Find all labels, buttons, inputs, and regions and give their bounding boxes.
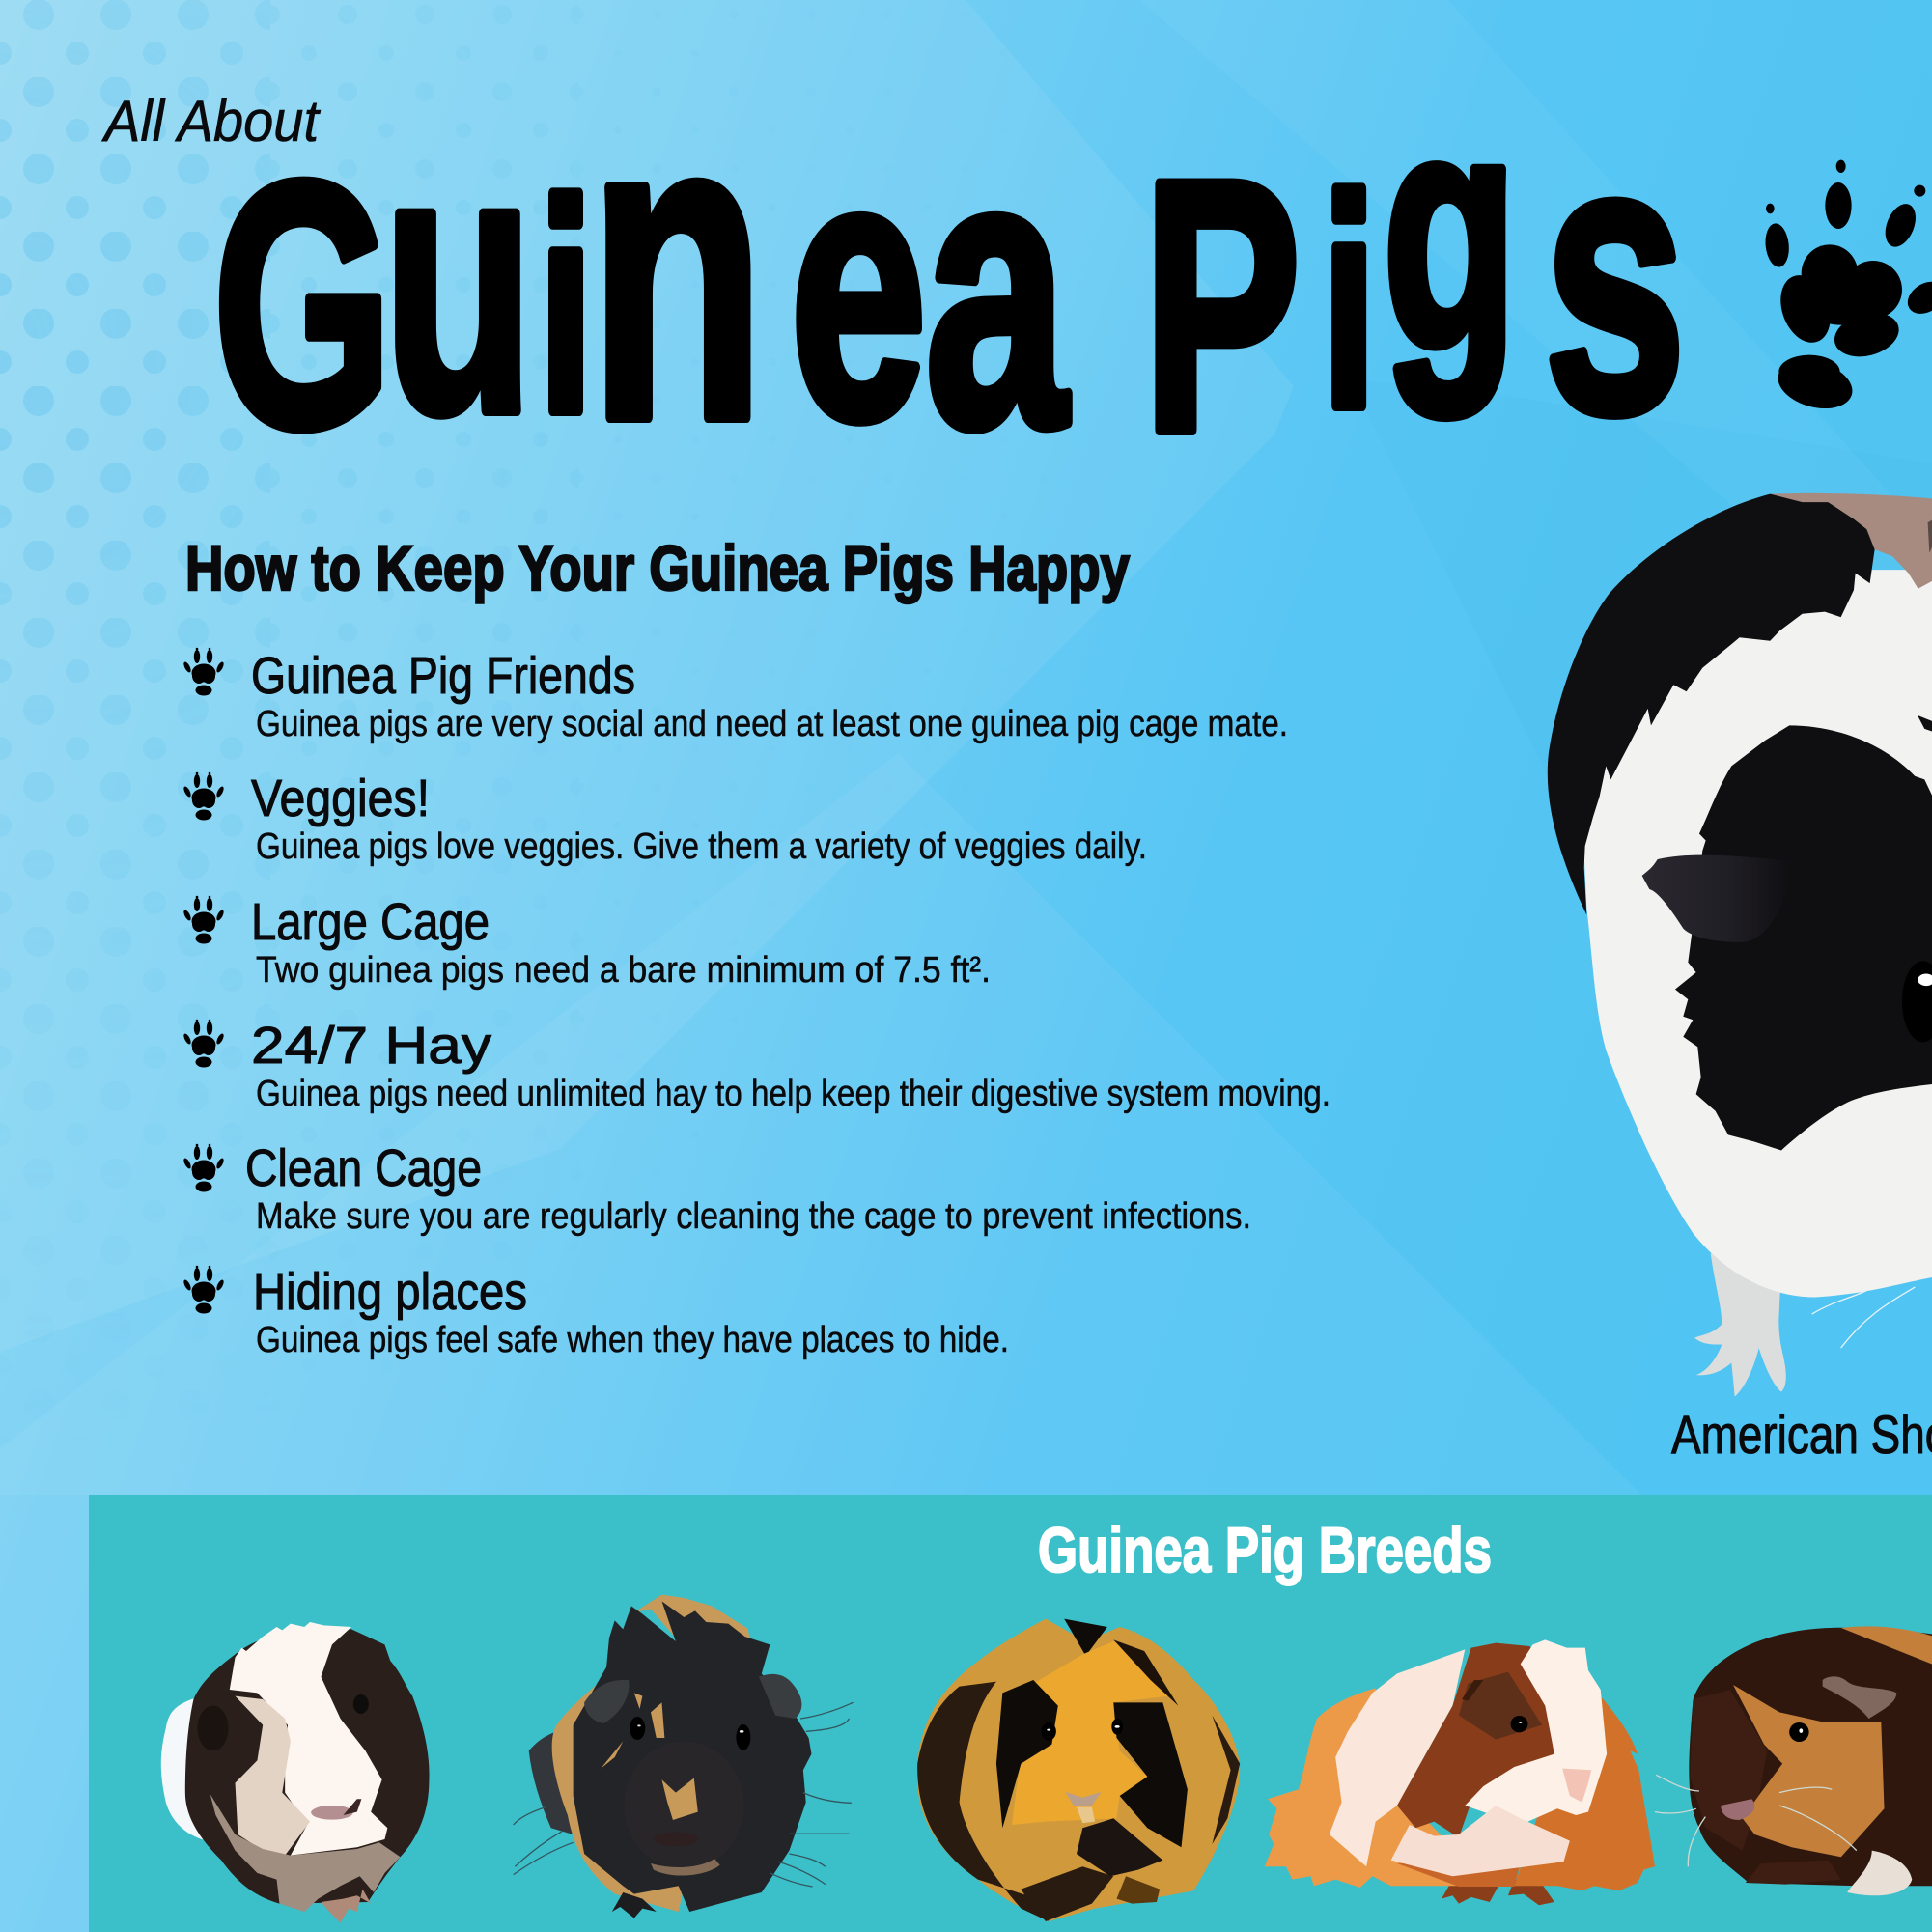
tip: veggies: Guinea pigs love veggies. Give them a variety of veggies daily. bbox=[256, 826, 1147, 867]
icon: large paw print bbox=[1763, 160, 1932, 416]
title: Guinea Pigs: u bbox=[383, 75, 534, 490]
title: Guinea Pigs: n bbox=[590, 24, 765, 510]
title: Guinea Pigs: i bbox=[539, 139, 594, 474]
breed: orange and white abyssinian guinea pig bbox=[1265, 1639, 1655, 1905]
heading: how to keep guinea pigs happy: How to Keep Your Guinea Pigs Happy bbox=[185, 532, 1130, 603]
breed: black and tan rough guinea pig bbox=[514, 1595, 854, 1918]
ear bbox=[1642, 855, 1790, 942]
brown crown bbox=[1770, 493, 1932, 589]
crown mark bbox=[1928, 519, 1932, 553]
title: Guinea Pigs: s bbox=[1544, 61, 1686, 492]
tip: large cage: Two guinea pigs need a bare minimum of 7.5 ft². bbox=[256, 950, 991, 991]
breed: tri-colour guinea pig bbox=[161, 1622, 430, 1923]
tip: veggies bbox=[182, 770, 1147, 867]
black back stripe bbox=[1548, 494, 1875, 915]
title: Guinea Pigs: a bbox=[925, 75, 1137, 507]
body bbox=[1583, 570, 1932, 1298]
title: Guinea Pigs: e bbox=[790, 82, 927, 497]
tip: clean cage: Make sure you are regularly cleaning the cage to prevent infections. bbox=[256, 1196, 1251, 1237]
brow mark bbox=[1918, 715, 1932, 732]
tip: 24/7 hay: Guinea pigs need unlimited hay to help keep their digestive system moving. bbox=[256, 1074, 1330, 1114]
tip: large cage bbox=[182, 893, 991, 991]
breed: brown and tan guinea pig bbox=[1655, 1626, 1932, 1895]
breed: golden long-haired guinea pig bbox=[917, 1619, 1240, 1921]
foot bbox=[1694, 1253, 1786, 1397]
tip: hiding places bbox=[182, 1263, 1009, 1360]
tip: veggies: Veggies! bbox=[251, 770, 430, 827]
panel: guinea pig breeds bbox=[89, 1495, 1932, 1932]
title: Guinea Pigs: G bbox=[213, 110, 392, 499]
tip: 24/7 hay bbox=[182, 1017, 1330, 1114]
eye bbox=[1902, 961, 1932, 1042]
tip: guinea pig friends: Guinea Pig Friends bbox=[251, 647, 635, 705]
list: tips bbox=[182, 647, 1330, 1360]
title: Guinea Pigs: g bbox=[1383, 43, 1517, 418]
eye highlight bbox=[1918, 974, 1932, 986]
tip: hiding places: Guinea pigs feel safe when they have places to hide. bbox=[256, 1320, 1009, 1360]
tip: guinea pig friends bbox=[182, 647, 1288, 744]
tip: 24/7 hay: 24/7 Hay bbox=[251, 1017, 491, 1075]
whiskers bbox=[1812, 1287, 1915, 1348]
black face patch bbox=[1675, 725, 1932, 1150]
tip: clean cage bbox=[182, 1139, 1251, 1237]
tip: hiding places: Hiding places bbox=[253, 1263, 527, 1321]
tip: clean cage: Clean Cage bbox=[245, 1139, 482, 1197]
panel heading: Guinea Pig Breeds bbox=[1038, 1514, 1492, 1585]
title: Guinea Pigs: i bbox=[1322, 134, 1377, 469]
tip: large cage: Large Cage bbox=[251, 893, 490, 951]
pre-title: All About: All About bbox=[101, 89, 321, 154]
illustration: american shorthair guinea pig bbox=[1548, 493, 1932, 1397]
tip: guinea pig friends: Guinea pigs are very social and need at least one guinea pig cage mate. bbox=[256, 704, 1288, 744]
title: Guinea Pigs: P bbox=[1143, 107, 1301, 506]
